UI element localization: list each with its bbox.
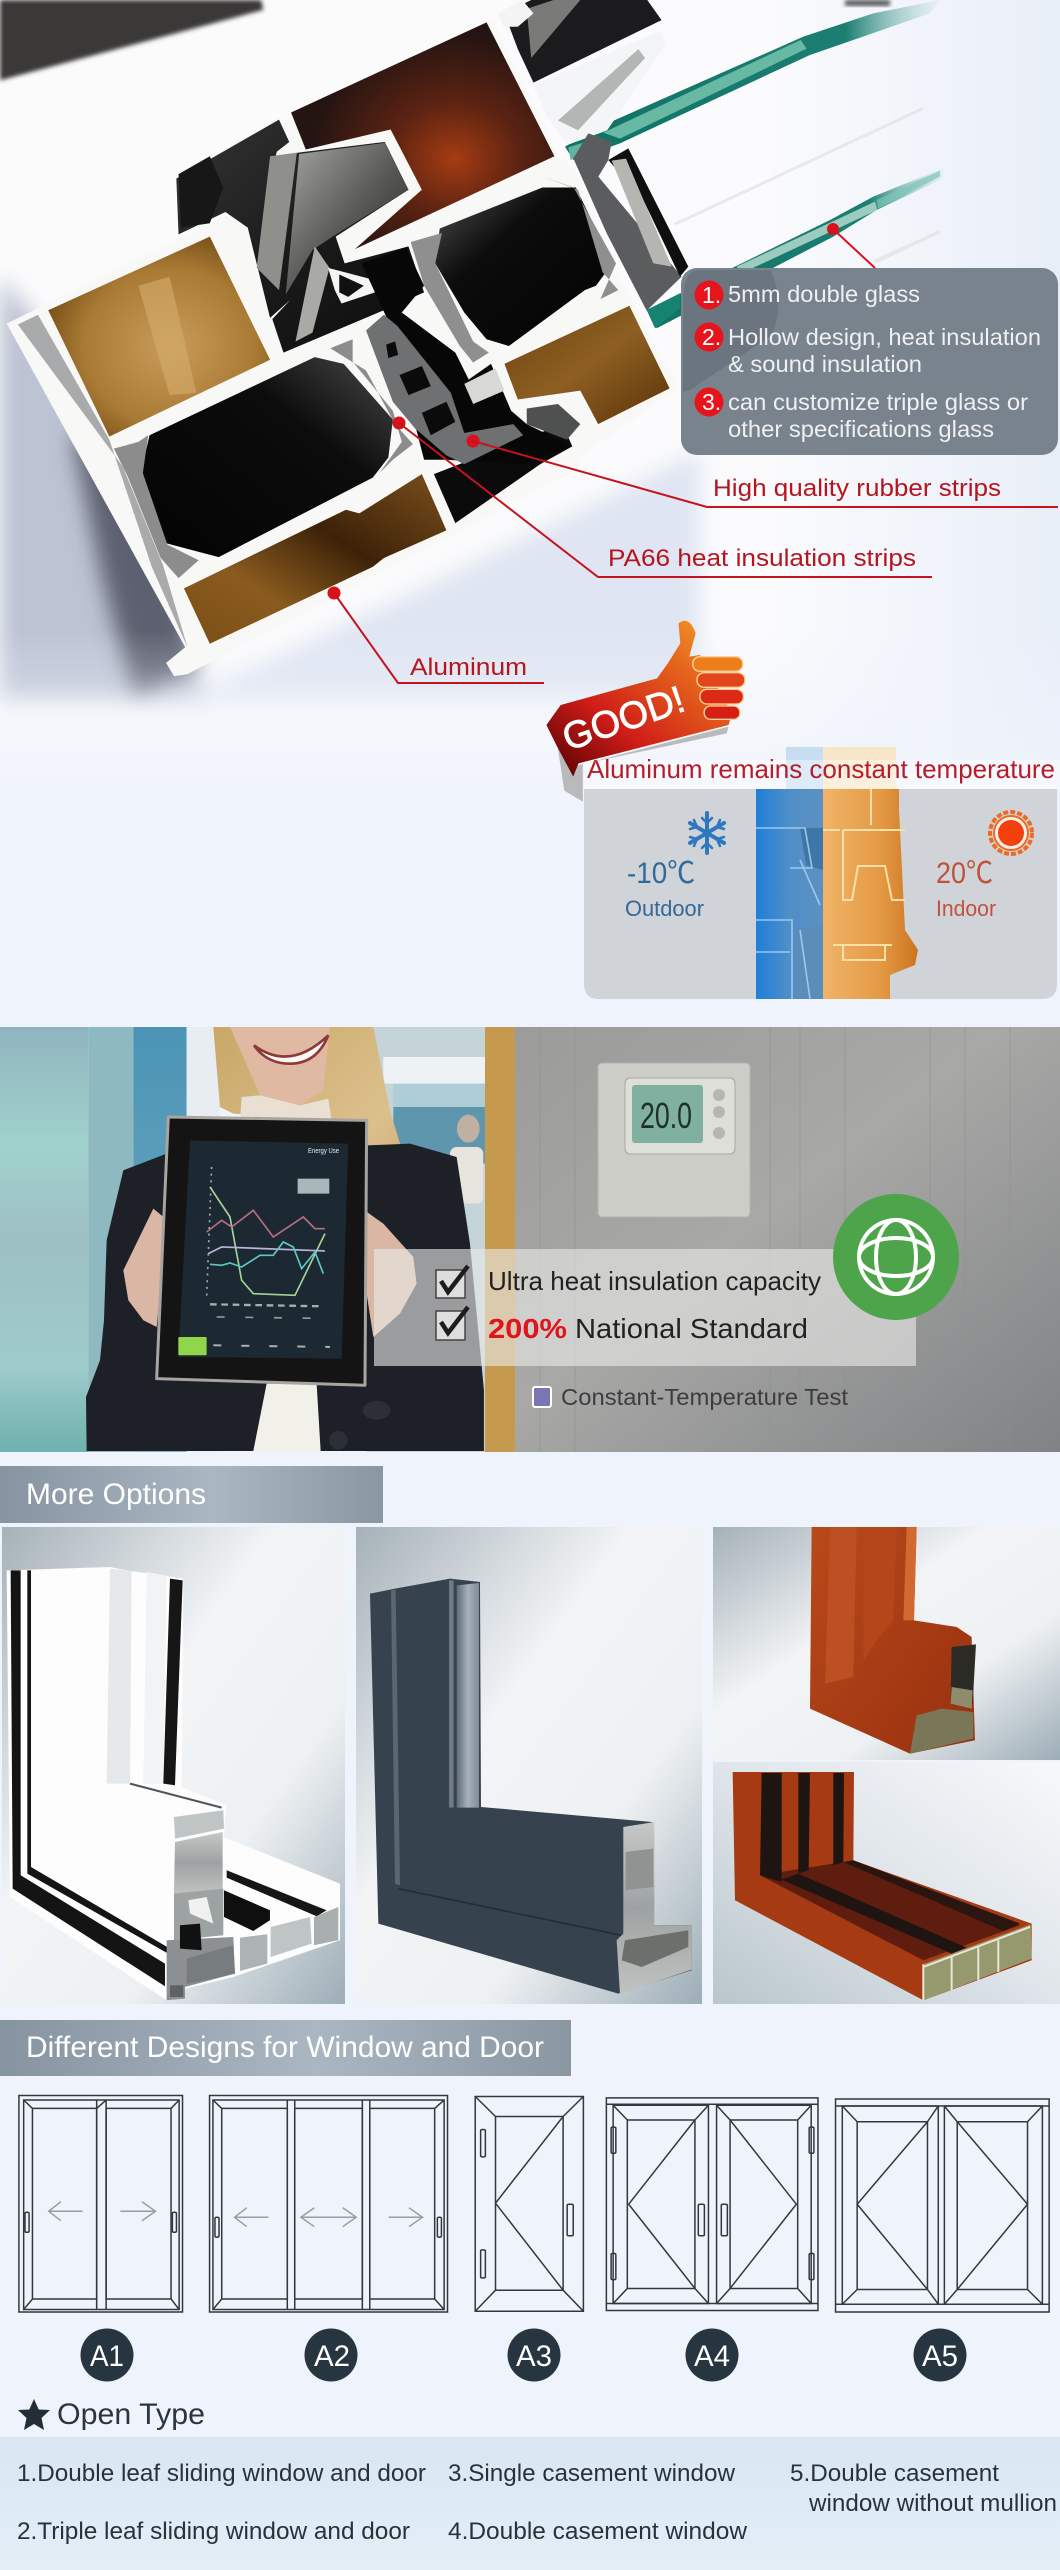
glass panes bbox=[565, 0, 943, 328]
diagram A2 bbox=[210, 2095, 448, 2312]
check item: heat insulation: Ultra heat insulation capacity bbox=[488, 1266, 821, 1296]
icon: snowflake bbox=[690, 813, 724, 853]
tablet caption: Energy Use bbox=[308, 1148, 339, 1155]
callout: glass features bbox=[681, 268, 1058, 455]
indoor temperature bbox=[936, 857, 996, 921]
test legend: Constant-Temperature Test bbox=[561, 1384, 849, 1410]
photo backdrop bbox=[0, 0, 1060, 810]
list item 5: window without mullion bbox=[808, 2490, 1057, 2517]
wood door frame bbox=[485, 1027, 515, 1452]
diagram A3 bbox=[475, 2096, 583, 2311]
diagram A1 bbox=[19, 2095, 183, 2312]
feature 3: other specifications glass bbox=[728, 416, 994, 442]
badge A2: A2 bbox=[314, 2340, 350, 2373]
card: white profile bbox=[2, 1527, 345, 2004]
label: rubber strips: High quality rubber strips bbox=[713, 475, 1001, 502]
icon: sun bbox=[990, 812, 1032, 854]
label: PA66 strips: PA66 heat insulation strips bbox=[608, 545, 916, 572]
heading: different designs: Different Designs for Window and Door bbox=[26, 2031, 544, 2064]
check item: national standard bbox=[436, 1307, 808, 1344]
feature 3 bbox=[694, 388, 1028, 442]
list item 3: 3.Single casement window bbox=[448, 2460, 736, 2487]
aluminum section body bbox=[7, 0, 679, 676]
badge A1: A1 bbox=[90, 2340, 124, 2373]
sealant and spacer bbox=[573, 133, 688, 328]
indoor temperature: Indoor bbox=[936, 896, 996, 921]
card: dark wood-grain profile bbox=[713, 1762, 1060, 2004]
icon: good thumbs up bbox=[546, 621, 745, 802]
outdoor temperature: -10℃ bbox=[627, 857, 695, 890]
thermostat: 20.0 bbox=[640, 1095, 692, 1136]
list item 2: 2.Triple leaf sliding window and door bbox=[17, 2518, 410, 2545]
panel: open type list bbox=[0, 2437, 1060, 2570]
indoor temperature: 20℃ bbox=[936, 857, 993, 890]
panel: window diagrams bbox=[19, 2095, 1049, 2382]
label: aluminum bbox=[328, 586, 544, 683]
badge A5 bbox=[914, 2328, 966, 2382]
heading: more options bbox=[0, 1466, 383, 1523]
feature 1: 1. bbox=[702, 282, 721, 308]
feature 2: 2. bbox=[702, 324, 721, 350]
thermal section blue and orange bbox=[756, 747, 918, 999]
panel: aluminum profile cross-section bbox=[0, 0, 1060, 810]
badge A4: A4 bbox=[694, 2340, 730, 2373]
label: aluminum: Aluminum bbox=[410, 654, 527, 681]
diagram A5 bbox=[836, 2099, 1049, 2312]
band: heading bbox=[584, 760, 1060, 789]
outdoor temperature bbox=[625, 857, 704, 921]
panel: constant temperature diagram bbox=[546, 621, 1060, 999]
card: grey profile bbox=[356, 1527, 702, 2004]
diagram A4 bbox=[606, 2098, 818, 2311]
badge A3: A3 bbox=[516, 2340, 552, 2373]
list item 1: 1.Double leaf sliding window and door bbox=[17, 2460, 426, 2487]
feature 3: can customize triple glass or bbox=[728, 389, 1028, 415]
badge text: GOOD!: GOOD! bbox=[557, 679, 690, 760]
feature 2: & sound insulation bbox=[728, 351, 922, 377]
feature 1: 5mm double glass bbox=[728, 281, 920, 307]
label: PA66 strips bbox=[392, 416, 932, 577]
grey diagram box bbox=[584, 789, 1057, 999]
feature 2: Hollow design, heat insulation bbox=[728, 324, 1041, 350]
thermostat bbox=[598, 1063, 750, 1217]
icon: green globe bbox=[833, 1194, 959, 1320]
badge A3 bbox=[508, 2328, 560, 2382]
check item: national standard: 200% bbox=[488, 1313, 567, 1344]
heading: constant temperature: Aluminum remains constant temperature bbox=[587, 754, 1055, 784]
photo: thermostat on wall bbox=[515, 1027, 1060, 1452]
list item 5 bbox=[790, 2460, 1057, 2517]
badge A4 bbox=[686, 2328, 738, 2382]
heading: open type: Open Type bbox=[57, 2398, 205, 2431]
outdoor temperature: Outdoor bbox=[625, 896, 704, 921]
label: rubber strips bbox=[466, 434, 1058, 507]
feature 3: 3. bbox=[702, 389, 721, 415]
panel: heat insulation photos bbox=[0, 1027, 1060, 1452]
list item 5: 5.Double casement bbox=[790, 2460, 999, 2487]
photo: woman with tablet bbox=[0, 1027, 487, 1452]
badge A1 bbox=[80, 2328, 134, 2382]
badge A2 bbox=[304, 2328, 358, 2382]
heading: different designs bbox=[0, 2020, 571, 2076]
panel: profile options bbox=[2, 1527, 1060, 2004]
feature 2 bbox=[694, 322, 1041, 377]
check item: national standard: National Standard bbox=[575, 1313, 808, 1344]
list item 4: 4.Double casement window bbox=[448, 2518, 748, 2545]
leader line: glass bbox=[827, 223, 875, 268]
card: wood-grain profile bbox=[713, 1527, 1060, 1760]
heading: more options: More Options bbox=[26, 1478, 206, 1511]
badge A5: A5 bbox=[922, 2340, 958, 2373]
translucent panel bbox=[374, 1249, 916, 1366]
